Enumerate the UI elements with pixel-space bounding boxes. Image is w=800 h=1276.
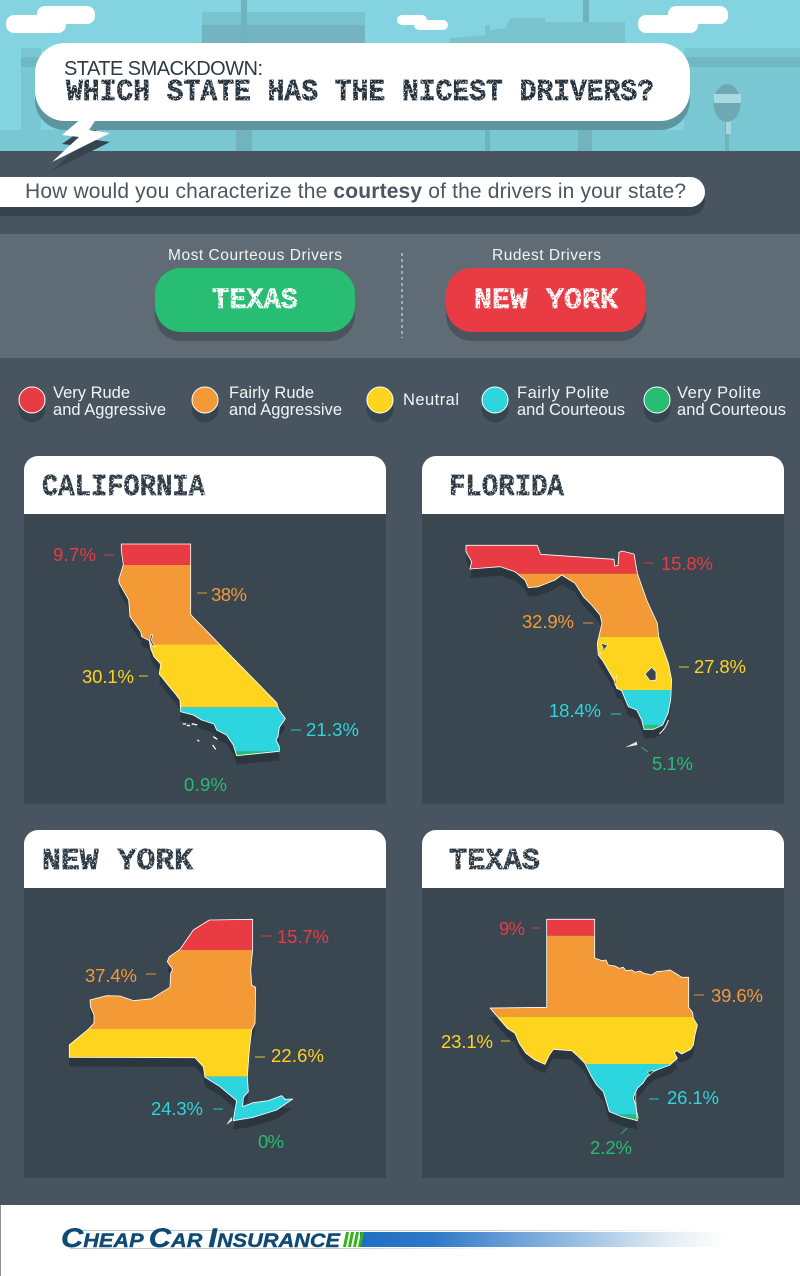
- data labels: florida: 32.9%: [522, 611, 574, 632]
- legend: [18, 384, 786, 422]
- legend: very polite: Very Polite: [677, 384, 761, 402]
- data labels: california: 21.3%: [306, 719, 359, 740]
- data labels: california: 38%: [211, 584, 247, 605]
- cloud: left: [6, 6, 95, 33]
- legend: very rude: [18, 384, 166, 422]
- most courteous button: [155, 268, 355, 341]
- data labels: california: 30.1%: [82, 666, 134, 687]
- data labels: new york: 15.7%: [277, 926, 329, 947]
- rudest state: NEW YORK: [474, 284, 618, 318]
- data labels: new york: 22.6%: [271, 1045, 324, 1066]
- data labels: florida: 5.1%: [652, 753, 693, 774]
- data labels: florida: 18.4%: [549, 700, 601, 721]
- cloud: right: [638, 6, 728, 33]
- logo: cheap car insurance: CHEAP CAR INSURANCE: [61, 1223, 341, 1253]
- legend: neutral: [366, 387, 459, 422]
- legend: fairly polite: [482, 384, 625, 422]
- data labels: texas: 26.1%: [667, 1087, 719, 1108]
- question text: How would you characterize the courtesy of the drivers in your state?: [25, 180, 686, 203]
- data labels: texas: 9%: [499, 918, 525, 939]
- cloud: middle: [397, 15, 448, 30]
- data labels: new york: [85, 926, 329, 1152]
- panel: texas: [422, 830, 784, 1178]
- footer: [0, 1205, 800, 1276]
- legend: very polite: and Courteous: [677, 401, 786, 419]
- rudest label: Rudest Drivers: [492, 247, 601, 264]
- rudest button: [446, 268, 646, 341]
- data labels: texas: 2.2%: [590, 1137, 632, 1158]
- panel: new york: [24, 830, 386, 1178]
- legend: fairly rude: [192, 384, 342, 422]
- legend: fairly rude: Fairly Rude: [229, 384, 314, 402]
- map: california: [113, 540, 293, 765]
- map: florida: [460, 540, 680, 747]
- heading: new york: NEW YORK: [42, 844, 193, 879]
- road band: [0, 151, 800, 235]
- legend: fairly polite: Fairly Polite: [517, 384, 609, 402]
- icon: road sign: [714, 84, 741, 151]
- data labels: california: 0.9%: [184, 774, 227, 795]
- legend: very polite: [644, 384, 786, 422]
- data labels: california: 9.7%: [53, 544, 96, 565]
- panel: winners: [0, 234, 800, 358]
- most courteous state: TEXAS: [212, 284, 298, 318]
- map: new york: [63, 913, 300, 1130]
- scene: sky and skyline background: [0, 0, 800, 151]
- data labels: texas: 23.1%: [441, 1031, 493, 1052]
- heading: florida: FLORIDA: [449, 470, 564, 505]
- data labels: new york: 0%: [258, 1131, 284, 1152]
- legend: very rude: Very Rude: [53, 384, 130, 402]
- data labels: florida: 27.8%: [694, 656, 746, 677]
- logo: cheap car insurance: [61, 1223, 725, 1253]
- map: texas: [483, 913, 703, 1130]
- data labels: new york: 24.3%: [151, 1098, 203, 1119]
- title: kicker: STATE SMACKDOWN:: [64, 58, 263, 80]
- heading: california: CALIFORNIA: [42, 470, 205, 505]
- title: main heading: WHICH STATE HAS THE NICEST DRIVERS?: [66, 75, 654, 110]
- data labels: texas: [441, 918, 763, 1158]
- data labels: california: [53, 544, 359, 795]
- legend: fairly polite: and Courteous: [517, 401, 625, 419]
- data labels: texas: 39.6%: [711, 985, 763, 1006]
- most courteous label: Most Courteous Drivers: [168, 247, 342, 264]
- data labels: new york: 37.4%: [85, 965, 137, 986]
- question banner: [0, 177, 705, 216]
- legend: very rude: and Aggressive: [53, 401, 166, 419]
- legend: fairly rude: and Aggressive: [229, 401, 342, 419]
- legend: neutral: Neutral: [403, 391, 459, 409]
- heading: texas: TEXAS: [449, 844, 540, 879]
- data labels: florida: [522, 553, 746, 774]
- panel: florida: [422, 456, 784, 804]
- data labels: florida: 15.8%: [661, 553, 713, 574]
- title speech bubble: [35, 43, 690, 171]
- panel: california: [24, 456, 386, 804]
